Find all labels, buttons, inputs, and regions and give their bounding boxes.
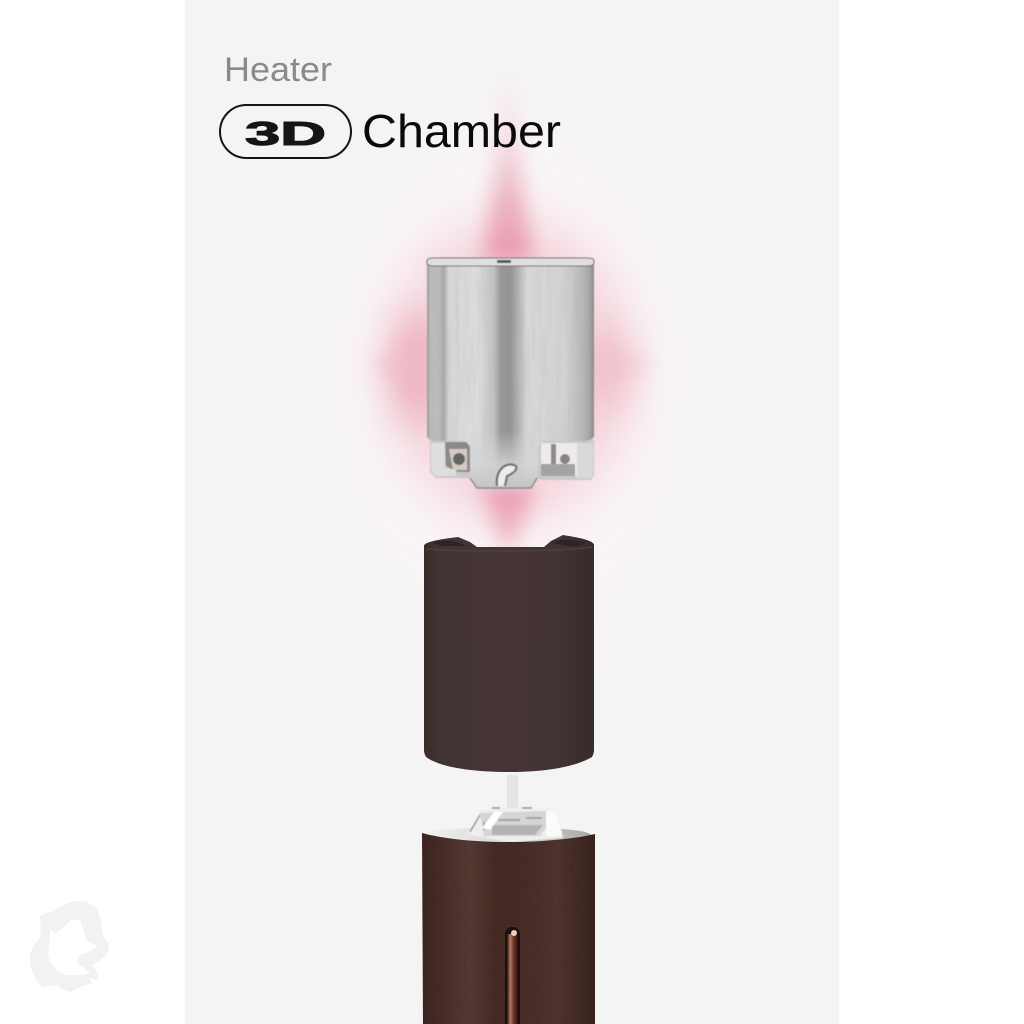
center foot: lower metal fade — [470, 430, 538, 488]
cylinder rim — [427, 258, 594, 266]
badge: 3D — [220, 105, 351, 158]
panel: background — [185, 0, 839, 1024]
title label: Heater: Heater — [224, 51, 332, 89]
sleeve top shading — [427, 547, 592, 551]
device body — [422, 808, 596, 1024]
watermark logo — [30, 901, 109, 992]
title: Chamber: Chamber — [362, 105, 561, 157]
body grain — [422, 830, 596, 1024]
heat glow — [340, 50, 680, 660]
body cylinder — [422, 833, 595, 1024]
cylinder feet — [430, 440, 594, 488]
brushed texture — [456, 287, 480, 313]
inner silver collar — [425, 827, 591, 843]
glass core — [467, 808, 563, 842]
steam line — [507, 775, 518, 810]
center foot hook — [497, 464, 516, 486]
badge: 3D: 3D — [245, 115, 326, 152]
heater chamber: metal cylinder — [427, 258, 594, 488]
left foot cut-out — [445, 442, 470, 472]
right foot cut-out — [541, 443, 577, 476]
cylinder body — [427, 262, 594, 488]
copper slot — [505, 927, 520, 1024]
silicone sleeve — [424, 535, 594, 772]
